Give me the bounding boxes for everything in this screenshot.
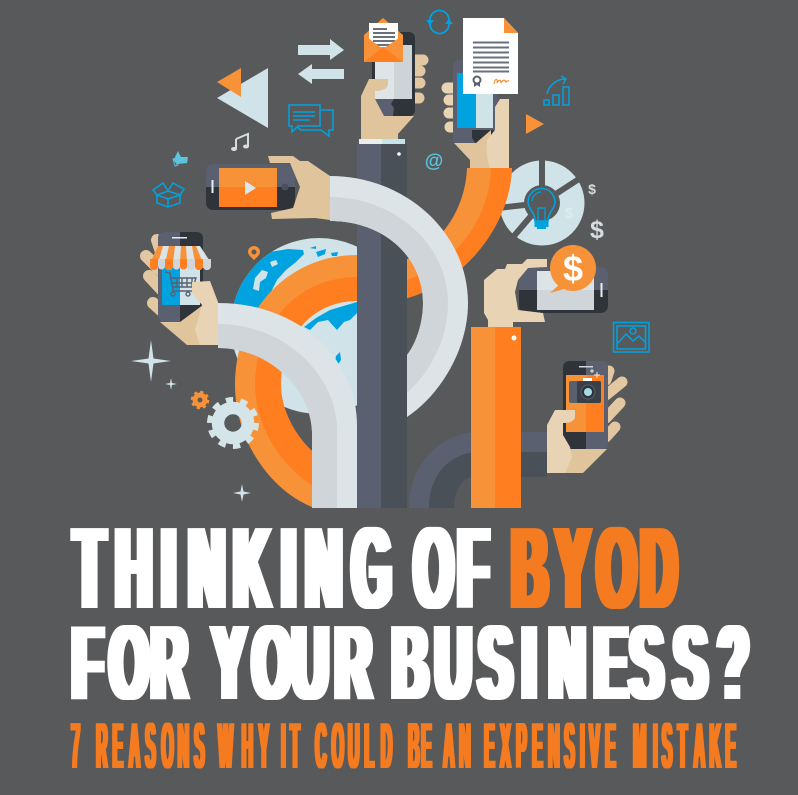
title: THINKING	[74, 503, 391, 633]
center gray arm	[330, 176, 468, 417]
title: YOUR	[213, 603, 371, 722]
navy sleeve lower overlay	[357, 226, 407, 508]
hand holding phone with dollar bubble	[484, 245, 608, 327]
icon: growth bar chart	[544, 76, 569, 105]
subtitle: 7	[71, 710, 80, 783]
hand holding shop phone	[146, 232, 218, 345]
icon: sparkles	[131, 340, 251, 502]
hand holding video phone	[206, 156, 330, 220]
icon: dollar signs: $	[590, 216, 604, 244]
navy lower-right arm	[409, 432, 547, 508]
subtitle: REASONS	[96, 710, 205, 783]
icon: dollar signs: $	[588, 181, 596, 197]
subtitle	[71, 710, 736, 783]
icon: at sign: @	[425, 151, 443, 172]
icon: striped awning	[150, 246, 211, 270]
subtitle: AN	[443, 710, 471, 783]
subtitle: EXPENSIVE	[484, 710, 616, 783]
icon: location pin	[248, 246, 260, 260]
icon: dollar bubble: $	[563, 248, 583, 289]
icon: small orange gear	[192, 392, 208, 408]
icon: envelope	[364, 18, 403, 62]
left gray arm	[218, 303, 357, 508]
icon: music note	[231, 134, 249, 151]
icon: exchange arrows	[298, 39, 344, 84]
icon: shopping cart	[165, 272, 196, 296]
icon: document	[463, 18, 518, 94]
globe	[234, 238, 357, 414]
hand holding phone with envelope	[361, 18, 423, 139]
navy center sleeve	[357, 139, 407, 508]
title: BUSINESS?	[392, 603, 749, 722]
icon: thumbs up	[173, 151, 188, 166]
subtitle: MISTAKE	[633, 710, 736, 783]
title: OF	[414, 503, 488, 633]
icon: large gear	[210, 400, 256, 446]
right orange sleeve arm	[400, 168, 512, 300]
orange right sleeve	[471, 327, 521, 508]
title: FOR	[72, 603, 187, 722]
orange ring arm	[235, 255, 357, 507]
subtitle: BE	[408, 710, 432, 783]
subtitle: COULD	[315, 710, 392, 783]
icon: play button	[245, 181, 256, 195]
icon: pie chart with light bulb: $	[565, 205, 574, 222]
subtitle: WHY	[218, 710, 269, 783]
hand holding phone with document	[447, 18, 518, 168]
icon: dollar signs	[588, 181, 604, 244]
icon: orange triangle	[526, 114, 544, 134]
title	[72, 503, 749, 722]
icon: pie chart with light bulb	[498, 152, 582, 243]
title: BYOD	[512, 503, 677, 633]
icon: open box	[153, 183, 184, 207]
hand holding camera phone	[547, 361, 622, 473]
icon: rewind triangles	[217, 68, 268, 128]
icon: sync arrows	[426, 11, 453, 34]
icon: chat bubbles	[289, 105, 333, 136]
icon: image frame	[614, 322, 649, 352]
icon: camera	[569, 369, 601, 403]
subtitle: IT	[281, 710, 300, 783]
